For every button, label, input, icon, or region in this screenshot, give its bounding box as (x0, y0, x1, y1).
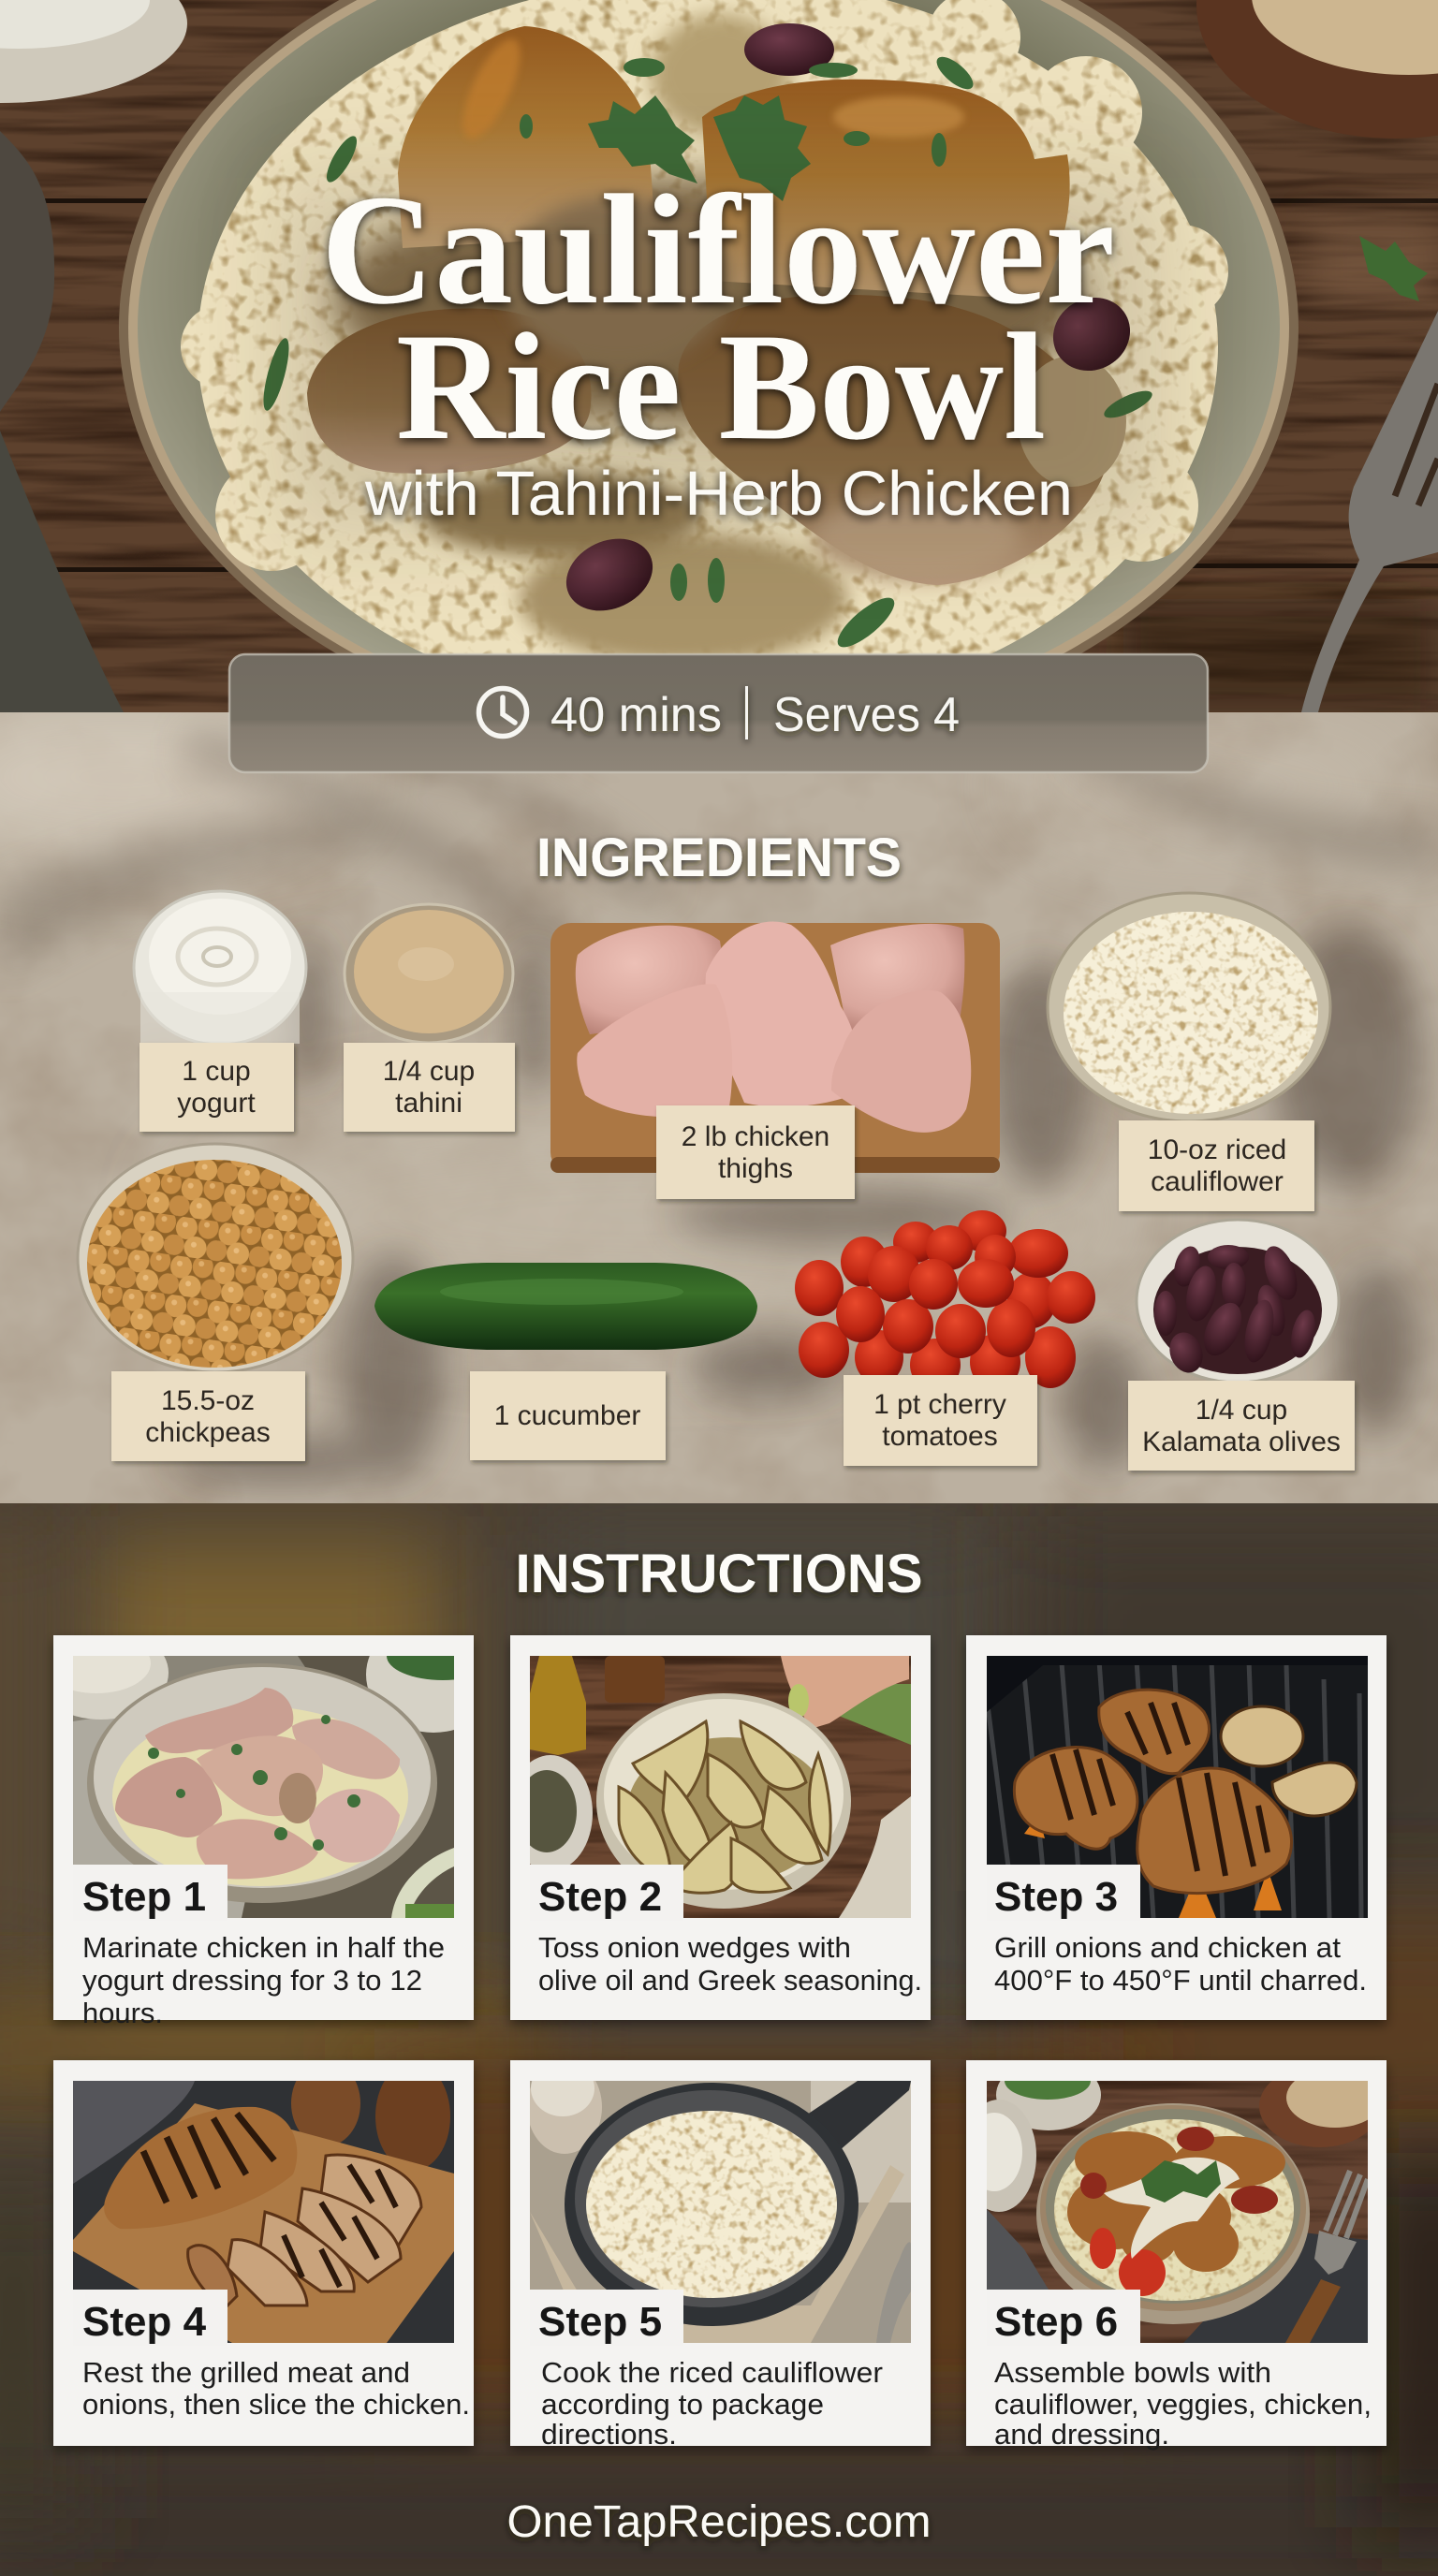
icon: parsley leaf on table (1359, 236, 1428, 301)
label: 1 pt cherry (873, 1389, 1006, 1420)
icon: tahini dish corner (1196, 0, 1438, 139)
label: 15.5-oz (161, 1385, 255, 1416)
ingredient: yogurt (134, 891, 306, 1132)
step text: Marinate chicken in half the (82, 1931, 445, 1964)
ingredient: riced cauliflower (1048, 893, 1330, 1211)
label: 1 cucumber (494, 1400, 640, 1431)
step tag (73, 2290, 227, 2346)
label (470, 1371, 666, 1460)
icon: ceramic bowl (119, 0, 1299, 654)
label: thighs (718, 1153, 793, 1184)
card: step 4: Step 4 (82, 2299, 207, 2345)
card: step 6 (961, 2059, 1387, 2451)
ingredient: tahini (344, 904, 515, 1132)
glass info pill (229, 654, 1208, 772)
time and servings text: 40 mins (550, 688, 722, 742)
label: cauliflower (1151, 1166, 1284, 1197)
photo: marinating chicken (73, 1656, 454, 1918)
step text: cauliflower, veggies, chicken, (994, 2388, 1372, 2421)
step text: olive oil and Greek seasoning. (538, 1964, 922, 1997)
time and servings text (550, 686, 960, 742)
food: herb chicken and sauce (307, 14, 1143, 665)
heading: ingredients: INGREDIENTS (536, 827, 902, 888)
step tag (530, 2290, 683, 2346)
ingredient: chickpeas (78, 1144, 353, 1461)
label (1119, 1120, 1314, 1211)
ingredient: cucumber (374, 1263, 757, 1460)
photo: onion wedges (530, 1656, 911, 1918)
step text: according to package (541, 2388, 824, 2421)
step tag (530, 1865, 683, 1921)
panel: ingredients background (0, 702, 1438, 1503)
food: cauliflower rice (181, 0, 1228, 716)
label (344, 1043, 515, 1132)
step text (82, 1931, 445, 2029)
step text: Toss onion wedges with (538, 1931, 851, 1964)
card: step 5 (510, 2060, 931, 2451)
label (656, 1105, 855, 1199)
card: step 3 (966, 1635, 1387, 2020)
ingredient: cherry tomatoes (795, 1210, 1095, 1466)
panel: instructions background (0, 1503, 1438, 2576)
step text: Grill onions and chicken at (994, 1931, 1341, 1964)
title (321, 163, 1115, 472)
footer website: OneTapRecipes.com (507, 2497, 931, 2547)
title: Rice Bowl (396, 302, 1046, 472)
card: step 4 (53, 2060, 474, 2446)
step text: 400°F to 450°F until charred. (994, 1964, 1367, 1997)
label (844, 1375, 1037, 1466)
label: tahini (395, 1088, 462, 1119)
step text: Cook the riced cauliflower (541, 2356, 883, 2389)
subtitle: with Tahini-Herb Chicken (364, 459, 1073, 529)
step text (541, 2356, 883, 2451)
card: step 5: Step 5 (538, 2299, 662, 2345)
ingredient: Kalamata olives (1128, 1220, 1355, 1471)
label (111, 1371, 305, 1461)
step text: yogurt dressing for 3 to 12 (82, 1964, 422, 1997)
heading: instructions: INSTRUCTIONS (515, 1544, 923, 1604)
step text: hours. (82, 1997, 163, 2029)
label: 1/4 cup (383, 1056, 475, 1087)
step tag (987, 1865, 1140, 1921)
icon: yogurt dish corner (0, 0, 187, 103)
step text: Rest the grilled meat and (82, 2356, 410, 2389)
label: yogurt (177, 1088, 256, 1119)
label (1128, 1381, 1355, 1471)
label: tomatoes (882, 1421, 998, 1452)
card: step 6: Step 6 (994, 2299, 1118, 2345)
step text (82, 2356, 470, 2421)
step tag (73, 1865, 227, 1921)
label: chickpeas (145, 1417, 271, 1448)
label: 1 cup (182, 1056, 251, 1087)
photo: cooked cauliflower rice (530, 2081, 911, 2343)
label: Kalamata olives (1142, 1427, 1341, 1457)
step text: directions. (541, 2418, 677, 2451)
card: step 1 (34, 1617, 501, 2029)
panel: hero photo of the bowl (0, 0, 1438, 748)
step tag (987, 2290, 1140, 2346)
card: step 3: Step 3 (994, 1874, 1118, 1920)
photo: assembled bowl (961, 2059, 1384, 2343)
label: 2 lb chicken (682, 1121, 829, 1152)
label (139, 1043, 294, 1132)
title: Cauliflower (321, 163, 1115, 337)
card: step 2 (508, 1635, 931, 2020)
photo: resting chicken (73, 2081, 454, 2343)
icon: parsley garnish (258, 51, 1155, 654)
step text: and dressing. (994, 2418, 1169, 2451)
icon: clock (479, 689, 526, 736)
photo: grilling chicken (987, 1656, 1368, 1918)
step text (538, 1931, 922, 1997)
step text: Assemble bowls with (994, 2356, 1271, 2389)
time and servings text: Serves 4 (773, 688, 960, 742)
step text (994, 1931, 1367, 1997)
label: 1/4 cup (1196, 1395, 1287, 1426)
ingredient: chicken thighs on board (550, 922, 1000, 1199)
icon: fork on table (1301, 311, 1438, 712)
card: step 1: Step 1 (82, 1874, 206, 1920)
label: 10-oz riced (1148, 1134, 1286, 1165)
card: step 2: Step 2 (538, 1874, 662, 1920)
icon: grey linen napkin (0, 131, 124, 712)
step text (994, 2356, 1372, 2451)
step text: onions, then slice the chicken. (82, 2388, 470, 2421)
